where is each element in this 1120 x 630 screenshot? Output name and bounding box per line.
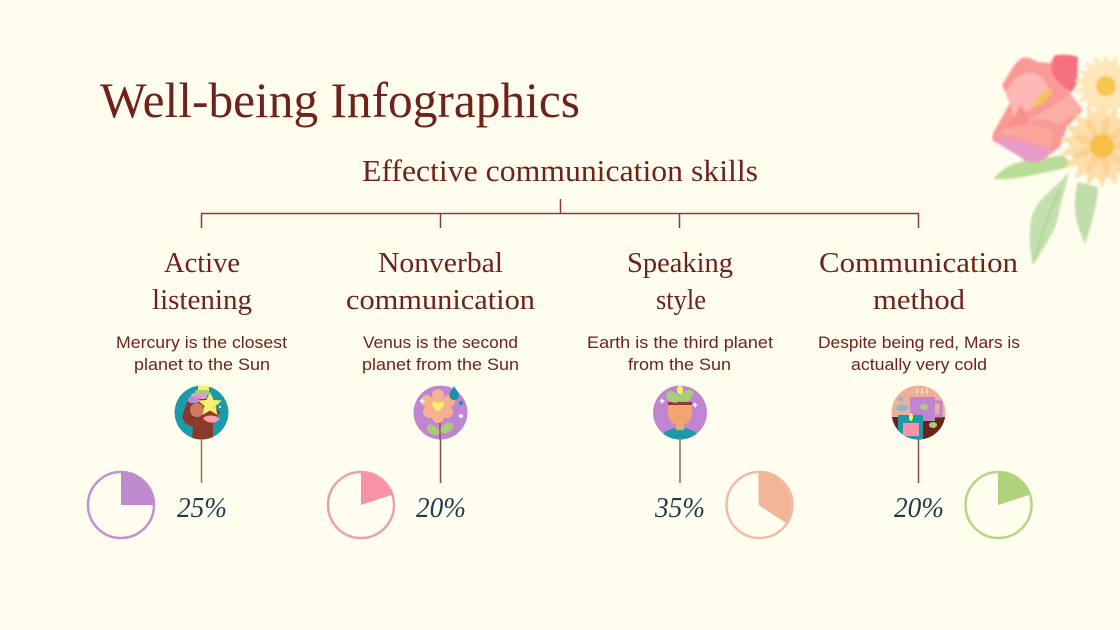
description: Earth is the third planet <box>587 333 773 352</box>
heading: Speaking <box>627 247 733 279</box>
stem <box>679 439 681 483</box>
illustration: watercolor flowers <box>992 54 1120 264</box>
description: Mercury is the closest <box>116 333 287 352</box>
heading: communication <box>346 284 536 316</box>
column 2: nonverbal communication <box>328 247 536 538</box>
icon: tea mug and candle <box>890 386 948 441</box>
column 4: communication method <box>818 247 1032 538</box>
value: 20% <box>416 492 466 524</box>
description: actually very cold <box>851 355 987 374</box>
column 3: speaking style <box>587 247 792 538</box>
pie chart 25% <box>88 472 154 538</box>
icon: flower <box>414 386 468 440</box>
description: Venus is the second <box>363 333 518 352</box>
subtitle: Effective communication skills <box>362 153 758 188</box>
icon: head with star <box>174 385 228 440</box>
leaves <box>993 155 1098 264</box>
value: 35% <box>654 492 705 524</box>
hierarchy connector lines <box>202 199 918 228</box>
pie chart 20% <box>328 472 394 538</box>
description: planet from the Sun <box>362 355 519 374</box>
column 1: active listening <box>88 247 287 538</box>
heading: style <box>656 284 706 316</box>
value: 25% <box>177 492 227 524</box>
description: planet to the Sun <box>134 355 270 374</box>
heading: Nonverbal <box>378 247 503 279</box>
upper daisy <box>1074 54 1120 118</box>
heading: Communication <box>819 247 1019 279</box>
lower daisy <box>1060 104 1120 188</box>
stem <box>440 439 442 483</box>
heading: Active <box>164 247 240 279</box>
pie chart 20% <box>966 472 1032 538</box>
heading: method <box>873 284 966 316</box>
pink peony <box>992 55 1083 162</box>
pie chart 35% <box>726 472 792 538</box>
stem <box>200 439 202 483</box>
value: 20% <box>894 492 944 524</box>
title: Well-being Infographics <box>100 72 580 128</box>
heading: listening <box>152 284 252 316</box>
description: from the Sun <box>628 355 731 374</box>
stem <box>918 439 920 483</box>
description: Despite being red, Mars is <box>818 333 1020 352</box>
icon: mindful head with plant <box>653 386 707 440</box>
